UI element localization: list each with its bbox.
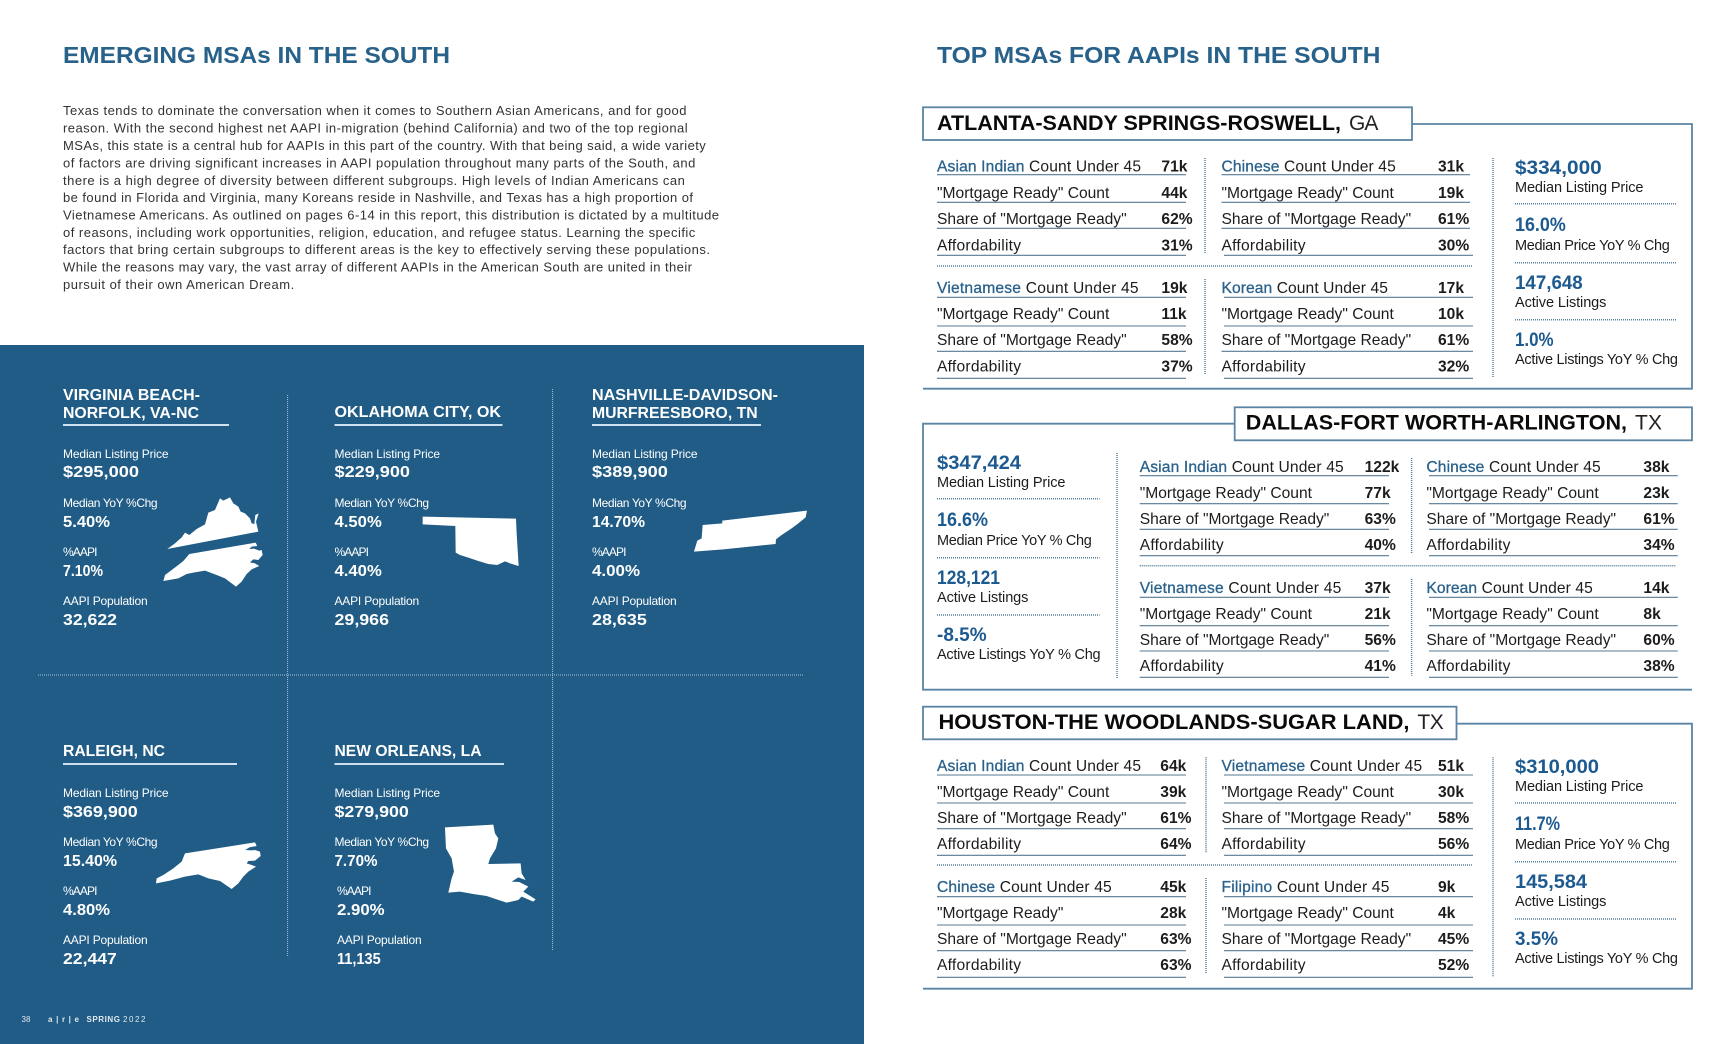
table: Chinese: Share of "Mortgage Ready": [1426, 511, 1616, 528]
card: Virginia Beach: 5.40%: [63, 514, 110, 531]
card: Virginia Beach: VIRGINIA BEACH-: [63, 387, 200, 404]
table: Filipino: 9k: [1438, 879, 1456, 896]
panel: Atlanta: [923, 107, 1692, 389]
text block: intro paragraph: reason. With the second highest net AAPI in-migration (behind California) and two of the top regional: [63, 120, 688, 136]
table: Filipino: Filipino Count Under 45: [1222, 879, 1390, 896]
table: Korean: "Mortgage Ready" Count: [1426, 606, 1599, 623]
card: New Orleans: Median Listing Price: [334, 786, 440, 800]
table: Vietnamese: 41%: [1365, 658, 1396, 675]
page footer: 2022: [123, 1015, 146, 1024]
card: Nashville: 14.70%: [592, 514, 645, 531]
table: Chinese: [1426, 459, 1678, 556]
table: Chinese: 63%: [1160, 931, 1192, 948]
table: Chinese: 31k: [1438, 158, 1464, 176]
table: Vietnamese: 56%: [1438, 836, 1469, 853]
card: New Orleans: AAPI Population: [337, 933, 422, 947]
table: Asian Indian: Share of "Mortgage Ready": [937, 211, 1127, 228]
text block: intro paragraph: While the reasons may vary, the vast array of different AAPIs in the American South are united in their: [63, 260, 693, 274]
stats: Dallas: Median Listing Price: [937, 475, 1065, 491]
table: Vietnamese: "Mortgage Ready" Count: [937, 306, 1110, 323]
card: Nashville: NASHVILLE-DAVIDSON-: [592, 387, 778, 404]
table: Vietnamese: Vietnamese Count Under 45: [1222, 758, 1423, 775]
table: Korean: 61%: [1438, 332, 1469, 349]
table: Filipino: 45%: [1438, 931, 1469, 948]
table: Vietnamese: Vietnamese Count Under 45: [1140, 580, 1342, 597]
stats: Atlanta: Median Listing Price: [1515, 180, 1643, 196]
card: Nashville: 4.00%: [592, 563, 640, 580]
card: Oklahoma City: 29,966: [334, 612, 389, 629]
card: New Orleans: [334, 743, 536, 968]
stats: Dallas: 16.6%: [937, 510, 988, 531]
card: New Orleans: %AAPI: [337, 884, 372, 898]
table: Chinese: Affordability: [1426, 537, 1511, 554]
table: Vietnamese: "Mortgage Ready" Count: [1222, 784, 1394, 801]
header: Atlanta: ATLANTA-SANDY SPRINGS-ROSWELL,: [937, 112, 1341, 135]
stats: Dallas: Active Listings: [937, 590, 1028, 606]
table: Chinese: [1222, 158, 1473, 255]
table: Asian Indian: "Mortgage Ready" Count: [1140, 485, 1313, 502]
table: Filipino: [1222, 879, 1473, 977]
page footer: [22, 1015, 146, 1024]
stats: Houston: [1515, 757, 1678, 967]
card: Oklahoma City: OKLAHOMA CITY, OK: [334, 404, 501, 421]
table: Asian Indian: 40%: [1365, 537, 1396, 554]
table: Asian Indian: 71k: [1161, 158, 1188, 176]
table: Vietnamese: 37%: [1161, 358, 1193, 376]
text block: intro paragraph: of factors are driving significant increases in AAPI population throughout many parts of the South, and: [63, 156, 695, 170]
table: Korean: 8k: [1643, 606, 1661, 623]
stats: Atlanta: Median Price YoY % Chg: [1515, 238, 1670, 254]
header: Houston: HOUSTON-THE WOODLANDS-SUGAR LAND,: [938, 711, 1410, 734]
table: Vietnamese: Share of "Mortgage Ready": [1222, 810, 1411, 827]
icon: Oklahoma map: [423, 517, 519, 566]
table: Vietnamese: 21k: [1365, 606, 1391, 623]
card: Raleigh: RALEIGH, NC: [63, 743, 165, 760]
stats: Dallas: $347,424: [937, 453, 1021, 474]
card: Raleigh: Median Listing Price: [63, 786, 169, 800]
table: Korean: 38%: [1643, 658, 1675, 675]
card: Raleigh: AAPI Population: [63, 933, 148, 947]
table: Korean: Korean Count Under 45: [1426, 580, 1593, 597]
table: Chinese: 19k: [1438, 185, 1464, 202]
card: Nashville: Median YoY %Chg: [592, 496, 687, 510]
card: Virginia Beach: [63, 387, 263, 629]
table: Asian Indian: [1140, 459, 1400, 556]
table: Chinese: Chinese Count Under 45: [1426, 459, 1601, 476]
table: Vietnamese: "Mortgage Ready" Count: [1140, 606, 1313, 623]
card: New Orleans: Median YoY %Chg: [334, 835, 429, 849]
table: Korean: Share of "Mortgage Ready": [1222, 332, 1411, 349]
table: Asian Indian: 63%: [1365, 511, 1396, 528]
header: Dallas: TX: [1635, 412, 1662, 434]
table: Asian Indian: 62%: [1161, 211, 1193, 228]
table: Asian Indian: 44k: [1161, 185, 1188, 202]
card: Raleigh: %AAPI: [63, 884, 98, 898]
stats: Dallas: Active Listings YoY % Chg: [937, 647, 1101, 663]
card: Raleigh: 22,447: [63, 951, 117, 968]
table: Chinese: Chinese Count Under 45: [937, 879, 1112, 896]
card: New Orleans: NEW ORLEANS, LA: [334, 743, 482, 760]
table: Asian Indian: 64k: [1160, 758, 1187, 775]
table: Vietnamese: 11k: [1161, 306, 1187, 323]
stats: Atlanta: [1515, 158, 1678, 368]
table: Filipino: 52%: [1438, 957, 1469, 974]
card: Raleigh: 15.40%: [63, 853, 117, 870]
card: Virginia Beach: AAPI Population: [63, 594, 148, 608]
table: Korean: 10k: [1438, 306, 1464, 323]
table: Vietnamese: [1140, 580, 1396, 677]
card: Oklahoma City: 4.50%: [334, 514, 382, 531]
icon: Louisiana map: [445, 825, 536, 903]
card: Nashville: [592, 387, 807, 629]
card: Nashville: 28,635: [592, 612, 647, 629]
stats: Houston: 11.7%: [1515, 814, 1560, 835]
table: Vietnamese: 37k: [1365, 580, 1391, 597]
table: Chinese: [937, 879, 1192, 977]
heading: emerging MSAs: EMERGING MSAs IN THE SOUTH: [63, 42, 450, 68]
table: Korean: [1426, 580, 1678, 677]
table: Chinese: "Mortgage Ready" Count: [1426, 485, 1599, 502]
stats: Atlanta: 16.0%: [1515, 215, 1566, 236]
table: Vietnamese: 19k: [1161, 280, 1188, 297]
card: Nashville: $389,900: [592, 464, 668, 481]
stats: Houston: 3.5%: [1515, 929, 1558, 950]
stats: Dallas: Median Price YoY % Chg: [937, 533, 1092, 549]
table: Asian Indian: 61%: [1160, 810, 1192, 827]
table: Asian Indian: Asian Indian Count Under 45: [937, 758, 1141, 775]
stats: Atlanta: Active Listings: [1515, 295, 1606, 311]
panel: Dallas: [923, 407, 1692, 690]
card: Oklahoma City: $229,900: [334, 464, 410, 481]
table: Chinese: Chinese Count Under 45: [1222, 158, 1396, 176]
table: Asian Indian: 77k: [1365, 485, 1391, 502]
table: Vietnamese: Share of "Mortgage Ready": [1140, 632, 1329, 649]
table: Korean: Share of "Mortgage Ready": [1426, 632, 1616, 649]
panel: emerging MSAs data: [0, 345, 864, 1044]
stats: Houston: Active Listings: [1515, 894, 1606, 910]
card: Nashville: MURFREESBORO, TN: [592, 405, 758, 422]
table: Chinese: 28k: [1160, 905, 1187, 922]
stats: Houston: Median Listing Price: [1515, 779, 1643, 795]
text block: intro paragraph: pursuit of their own American Dream.: [63, 277, 294, 292]
table: Asian Indian: Asian Indian Count Under 45: [1140, 459, 1344, 476]
panel: emerging MSAs intro: [63, 42, 719, 292]
table: Chinese: Share of "Mortgage Ready": [937, 931, 1127, 948]
card: New Orleans: $279,900: [334, 804, 409, 821]
table: Vietnamese: Vietnamese Count Under 45: [937, 280, 1139, 297]
card: Nashville: %AAPI: [592, 545, 626, 559]
table: Chinese: 45k: [1160, 879, 1187, 896]
card: Nashville: AAPI Population: [592, 594, 677, 608]
text block: intro paragraph: MSAs, this state is a central hub for AAPIs in this part of the country. With that being said, a wide variety: [63, 138, 706, 153]
table: Asian Indian: Affordability: [937, 836, 1021, 853]
text block: intro paragraph: [63, 103, 719, 292]
table: Chinese: 38k: [1643, 459, 1670, 476]
page footer: SPRING: [86, 1015, 120, 1024]
table: Asian Indian: "Mortgage Ready" Count: [937, 185, 1110, 202]
panel: Houston: [923, 707, 1692, 989]
card: New Orleans: 2.90%: [337, 902, 385, 919]
card: Oklahoma City: [334, 404, 519, 629]
table: Filipino: Share of "Mortgage Ready": [1222, 931, 1411, 948]
stats: Houston: 145,584: [1515, 872, 1587, 893]
table: Asian Indian: Share of "Mortgage Ready": [1140, 511, 1329, 528]
page footer: a | r | e: [48, 1015, 80, 1024]
table: Asian Indian: Affordability: [1140, 537, 1224, 554]
icon: North Carolina map: [156, 842, 261, 889]
table: Chinese: 63%: [1160, 957, 1192, 974]
text block: intro paragraph: Texas tends to dominate the conversation when it comes to Southern Asian Americans, and for good: [63, 103, 686, 118]
card: Oklahoma City: Median YoY %Chg: [334, 496, 429, 510]
table: Asian Indian: Asian Indian Count Under 45: [937, 158, 1141, 176]
stats: Dallas: -8.5%: [937, 625, 987, 646]
table: Asian Indian: [937, 758, 1192, 855]
stats: Atlanta: Active Listings YoY % Chg: [1515, 352, 1678, 368]
table: Asian Indian: Affordability: [937, 238, 1021, 254]
table: Korean: Affordability: [1426, 658, 1511, 675]
stats: Atlanta: 147,648: [1515, 273, 1583, 294]
card: Virginia Beach: 7.10%: [63, 563, 103, 580]
card: Raleigh: [63, 743, 261, 968]
header: Dallas: DALLAS-FORT WORTH-ARLINGTON,: [1246, 412, 1627, 434]
table: Asian Indian: 64%: [1160, 836, 1192, 853]
card: Virginia Beach: Median YoY %Chg: [63, 496, 158, 510]
text block: intro paragraph: Vietnamese Americans. As outlined on pages 6-14 in this report, this distribution is dictated by a multitude: [63, 208, 719, 222]
card: Nashville: Median Listing Price: [592, 447, 698, 461]
table: Korean: "Mortgage Ready" Count: [1222, 306, 1394, 323]
table: Vietnamese: Affordability: [1140, 658, 1224, 675]
table: Asian Indian: Share of "Mortgage Ready": [937, 810, 1127, 827]
table: Chinese: 61%: [1438, 211, 1469, 228]
table: Chinese: 61%: [1643, 511, 1675, 528]
card: Oklahoma City: AAPI Population: [334, 594, 419, 608]
table: Korean: 17k: [1438, 280, 1464, 297]
card: Raleigh: Median YoY %Chg: [63, 835, 158, 849]
table: Filipino: "Mortgage Ready" Count: [1222, 905, 1394, 922]
table: Asian Indian: 31%: [1161, 238, 1193, 254]
table: Vietnamese: [937, 280, 1193, 378]
card: Raleigh: 4.80%: [63, 902, 110, 919]
icon: Virginia and North Carolina maps: [163, 497, 263, 587]
table: Asian Indian: "Mortgage Ready" Count: [937, 784, 1110, 801]
card: Virginia Beach: Median Listing Price: [63, 447, 169, 461]
card: Virginia Beach: 32,622: [63, 612, 117, 629]
stats: Houston: Median Price YoY % Chg: [1515, 837, 1670, 853]
header: Atlanta: GA: [1349, 112, 1378, 135]
card: Oklahoma City: 4.40%: [334, 563, 382, 580]
table: Vietnamese: 58%: [1161, 332, 1193, 349]
table: Vietnamese: Affordability: [937, 358, 1021, 376]
table: Korean: 32%: [1438, 358, 1469, 376]
table: Korean: Korean Count Under 45: [1222, 280, 1388, 297]
stats: Dallas: 128,121: [937, 568, 1000, 589]
table: Korean: Affordability: [1222, 358, 1306, 376]
card: New Orleans: 11,135: [337, 951, 381, 968]
table: Chinese: "Mortgage Ready" Count: [1222, 185, 1394, 202]
heading: top MSAs: TOP MSAs FOR AAPIs IN THE SOUTH: [937, 42, 1380, 68]
card: New Orleans: 7.70%: [334, 853, 378, 870]
stats: Atlanta: $334,000: [1515, 158, 1602, 179]
table: Korean: [1222, 280, 1473, 378]
card: Oklahoma City: Median Listing Price: [334, 447, 440, 461]
card: Virginia Beach: %AAPI: [63, 545, 98, 559]
card: Oklahoma City: %AAPI: [334, 545, 369, 559]
table: Vietnamese: Share of "Mortgage Ready": [937, 332, 1127, 349]
table: Asian Indian: 39k: [1160, 784, 1187, 801]
table: Chinese: 34%: [1643, 537, 1675, 554]
header: Houston: TX: [1417, 711, 1444, 734]
table: Chinese: Affordability: [937, 957, 1021, 974]
table: Vietnamese: Affordability: [1222, 836, 1306, 853]
table: Chinese: Share of "Mortgage Ready": [1222, 211, 1411, 228]
table: Vietnamese: [1222, 758, 1473, 855]
table: Filipino: 4k: [1438, 905, 1456, 922]
table: Vietnamese: 56%: [1365, 632, 1396, 649]
stats: Dallas: [937, 453, 1101, 663]
table: Asian Indian: [937, 158, 1193, 255]
stats: Atlanta: 1.0%: [1515, 330, 1554, 351]
table: Filipino: Affordability: [1222, 957, 1306, 974]
card: Raleigh: $369,900: [63, 804, 138, 821]
table: Vietnamese: 51k: [1438, 758, 1464, 775]
text block: intro paragraph: there is a high degree of diversity between different subgroups. High levels of Indian Americans can: [63, 173, 685, 188]
text block: intro paragraph: be found in Florida and Virginia, many Koreans reside in Nashville, and Texas has a high proportion of: [63, 190, 693, 205]
icon: Tennessee map: [694, 511, 807, 552]
table: Chinese: Affordability: [1222, 238, 1306, 254]
table: Vietnamese: 30k: [1438, 784, 1464, 801]
card: Virginia Beach: NORFOLK, VA-NC: [63, 405, 199, 422]
text block: intro paragraph: factors that bring certain subgroups to different areas is the key to effectively serving these populations.: [63, 242, 710, 257]
table: Korean: 14k: [1643, 580, 1670, 597]
table: Asian Indian: 122k: [1365, 459, 1400, 476]
table: Chinese: 30%: [1438, 238, 1469, 254]
table: Chinese: 23k: [1643, 485, 1670, 502]
page footer: 38: [22, 1015, 31, 1024]
table: Korean: 60%: [1643, 632, 1675, 649]
card: Virginia Beach: $295,000: [63, 464, 139, 481]
stats: Houston: $310,000: [1515, 757, 1599, 778]
stats: Houston: Active Listings YoY % Chg: [1515, 951, 1678, 967]
table: Chinese: "Mortgage Ready": [937, 905, 1063, 922]
text block: intro paragraph: of reasons, including work opportunities, religion, education, and refugee status. Learning the specific: [63, 225, 696, 240]
table: Vietnamese: 58%: [1438, 810, 1469, 827]
